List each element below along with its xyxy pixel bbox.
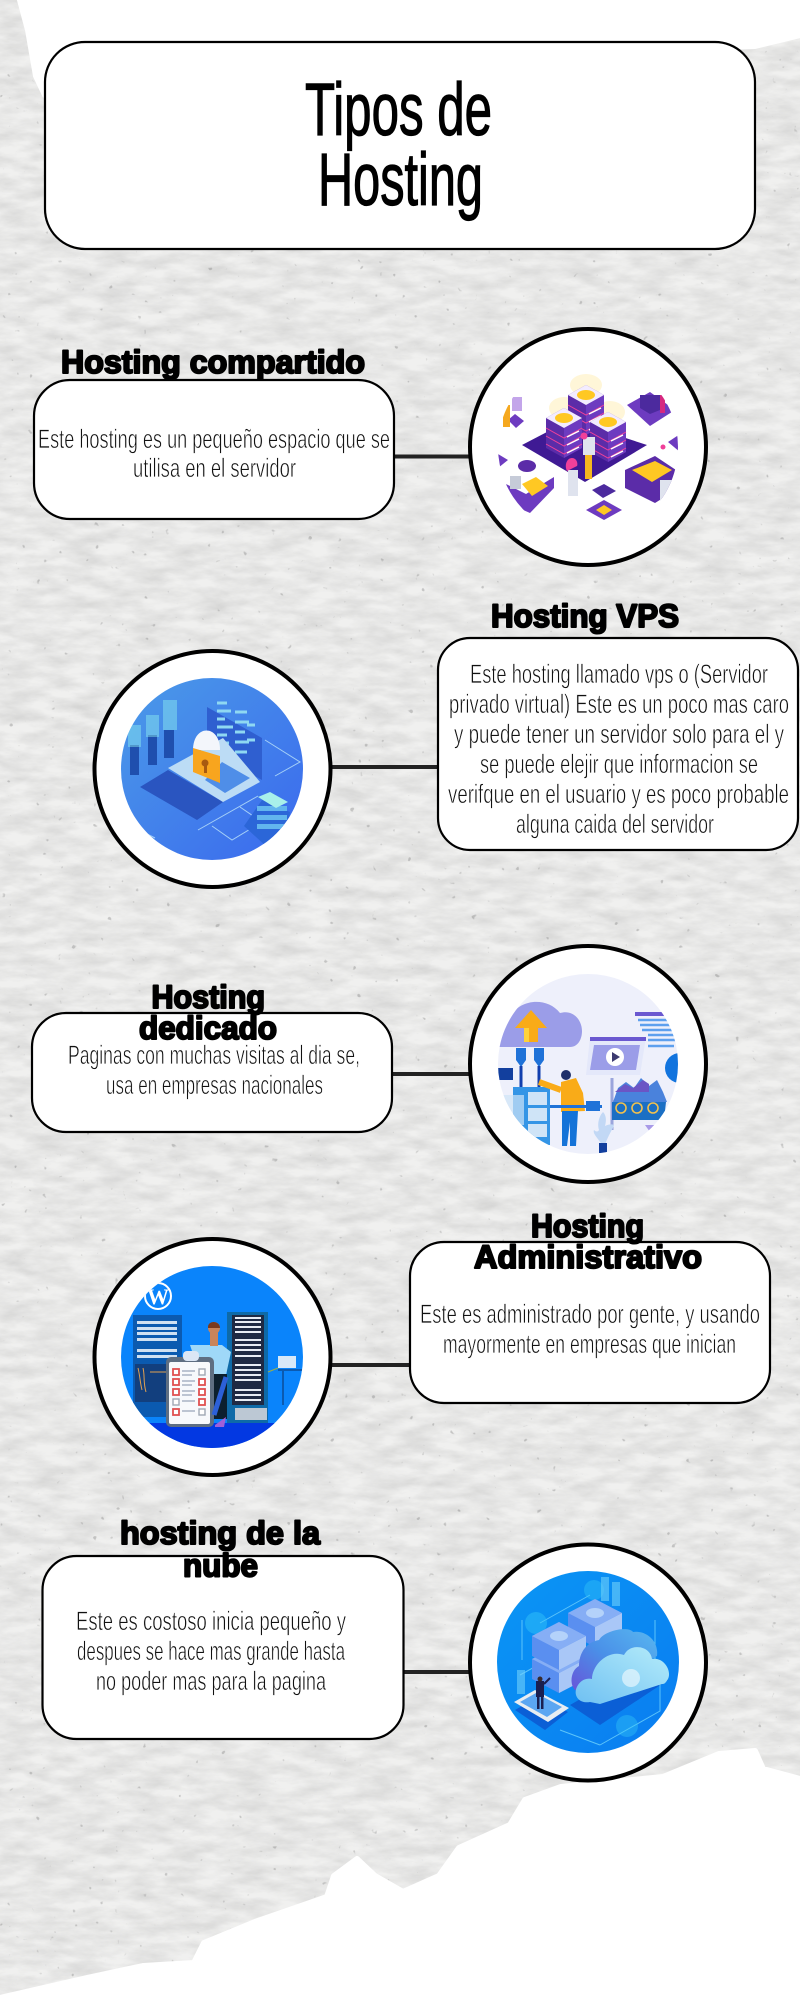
text: hosting dedicado [68, 1040, 360, 1100]
text: hosting compartido [38, 424, 390, 483]
title: Hosting [318, 138, 483, 221]
text: hosting de la nube: Este es costoso inicia pequeño y [76, 1606, 346, 1636]
icon: technician with cloud [470, 946, 706, 1182]
heading: hosting vps: Hosting VPS [491, 598, 679, 634]
icon: blue padlock laptop [94, 651, 330, 887]
panel: hosting dedicado [32, 979, 392, 1132]
icon: wordpress logo: W [147, 1284, 169, 1309]
text: hosting vps [448, 659, 789, 839]
heading: hosting dedicado: Hosting [152, 979, 265, 1015]
panel: hosting vps [438, 598, 798, 850]
connector: hosting de la nube [404, 1670, 470, 1674]
text: hosting dedicado: Paginas con muchas visitas al dia se, [68, 1040, 360, 1070]
icon: server technician with checklist [94, 1239, 330, 1475]
panel: hosting administrativo [410, 1208, 770, 1403]
title [305, 68, 492, 221]
title panel [45, 42, 755, 249]
panel: hosting de la nube [42, 1515, 404, 1739]
heading: hosting de la nube: hosting de la [120, 1515, 320, 1551]
text: hosting administrativo [420, 1299, 760, 1359]
icon: cloud servers [470, 1544, 706, 1780]
heading: hosting administrativo [474, 1208, 702, 1275]
connector: hosting compartido [394, 454, 470, 458]
heading: hosting administrativo: Hosting [531, 1208, 644, 1244]
heading: hosting administrativo: Administrativo [474, 1239, 702, 1275]
text: hosting dedicado: usa en empresas nacionales [106, 1070, 323, 1100]
text: hosting de la nube: no poder mas para la pagina [96, 1666, 327, 1696]
connector: hosting dedicado [392, 1072, 470, 1076]
icon: purple servers [470, 329, 706, 565]
text: hosting de la nube [76, 1606, 346, 1696]
connector: hosting administrativo [331, 1363, 410, 1367]
heading: hosting de la nube [120, 1515, 320, 1584]
text: hosting compartido: utilisa en el servidor [133, 453, 296, 483]
heading: hosting compartido: Hosting compartido [61, 344, 365, 380]
panel: hosting compartido [34, 344, 394, 519]
connector: hosting vps [331, 765, 438, 769]
heading: hosting dedicado [139, 979, 277, 1046]
text: hosting compartido: Este hosting es un pequeño espacio que se [38, 424, 390, 454]
heading: hosting dedicado: dedicado [139, 1010, 277, 1046]
heading: hosting de la nube: nube [183, 1548, 258, 1584]
text: hosting de la nube: despues se hace mas grande hasta [77, 1636, 346, 1666]
title: Tipos de [305, 68, 492, 151]
